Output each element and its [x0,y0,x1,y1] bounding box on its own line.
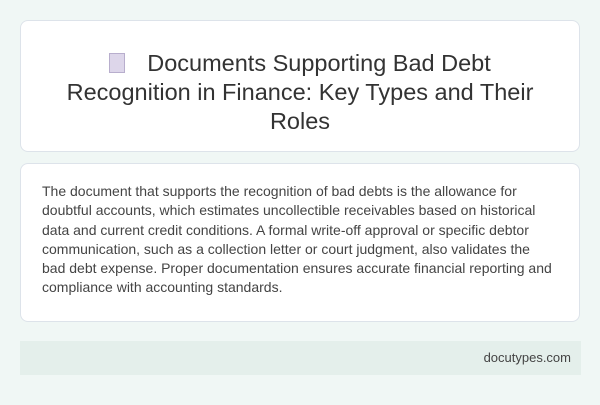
icon: document [109,53,125,73]
panel: title [20,20,580,152]
footer [20,341,581,375]
title: Documents Supporting Bad Debt Recognition in Finance: Key Types and Their Roles [67,50,533,134]
panel: description [20,163,580,322]
text block: The document that supports the recognition of bad debts is the allowance for doubtful accounts, which estimates uncollectible receivables based on historical data and current credit conditions. A formal write-off approval or specific debtor communication, such as a collection letter or court judgment, also validates the bad debt expense. Proper documentation ensures accurate financial reporting and compliance with accounting standards. [42,183,552,295]
footer text: docutypes.com [484,350,571,365]
